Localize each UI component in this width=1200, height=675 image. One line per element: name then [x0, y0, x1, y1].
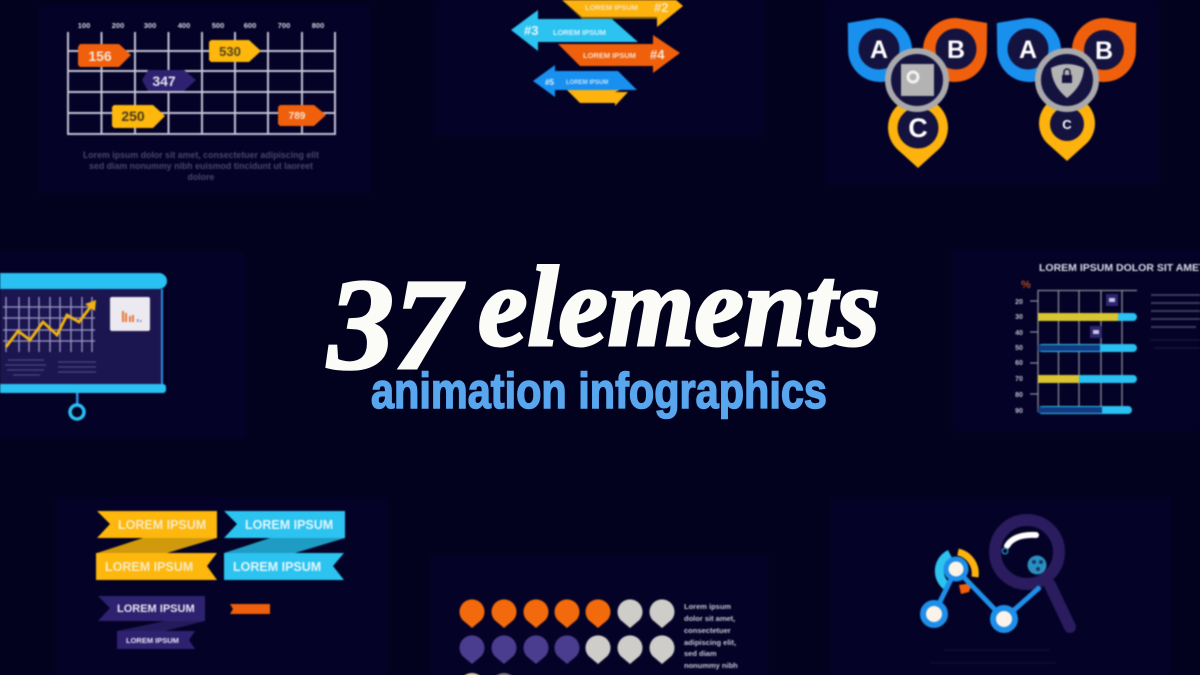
purple ribbon: LOREM IPSUM	[126, 636, 179, 645]
axis labels: 100	[78, 21, 90, 30]
arrow 4: LOREM IPSUM	[583, 51, 636, 60]
row labels: 90	[1015, 408, 1023, 415]
arrow 3: LOREM IPSUM	[553, 28, 606, 37]
side text: Lorem ipsum	[684, 602, 731, 611]
row labels: 50	[1015, 345, 1023, 352]
stand ring	[70, 393, 84, 419]
panel: pin pictogram	[430, 555, 768, 675]
row labels: 20	[1015, 299, 1023, 306]
tag 530: 530	[219, 44, 241, 59]
purple pins	[460, 635, 580, 664]
bar 1	[1038, 313, 1137, 321]
board	[0, 289, 162, 385]
tag 156: 156	[88, 48, 112, 64]
arrow 2	[562, 0, 683, 27]
left pin group: C	[908, 113, 928, 143]
left pin group	[827, 0, 1008, 168]
top bar	[0, 273, 167, 289]
tag 156	[78, 44, 131, 67]
right pin group: A	[1019, 36, 1037, 64]
bar 2	[1038, 344, 1137, 352]
arrow 2: #2	[654, 0, 668, 15]
axis labels: 300	[144, 21, 156, 30]
yellow ribbon: LOREM IPSUM	[118, 518, 206, 532]
panel: presentation board	[0, 252, 245, 438]
purple ribbon: LOREM IPSUM	[117, 603, 195, 615]
yellow ribbon: LOREM IPSUM	[105, 560, 193, 574]
line chart	[923, 559, 1040, 630]
panel: percentage bars	[952, 250, 1200, 432]
value markers	[1090, 294, 1118, 338]
bar 3	[1038, 375, 1137, 383]
panel: arrows	[433, 0, 765, 137]
arrow 3: #3	[524, 23, 538, 38]
row labels: 30	[1015, 314, 1023, 321]
caption	[83, 150, 319, 182]
icon: shield lock	[1051, 64, 1084, 98]
yellow ribbon	[96, 511, 217, 580]
title	[326, 243, 880, 397]
chart grid	[3, 297, 95, 352]
caption: Lorem ipsum dolor sit amet, consectetuer adipiscing elit	[83, 150, 319, 160]
right pin group: B	[1095, 37, 1113, 65]
arrow 5	[533, 65, 637, 97]
row labels: 70	[1015, 376, 1023, 383]
caption: sed diam nonummy nibh euismod tincidunt ut laoreet	[89, 161, 313, 171]
grid	[1030, 290, 1137, 412]
side text: sed diam	[684, 649, 717, 658]
left pin group: A	[870, 36, 888, 64]
side text	[1151, 295, 1200, 327]
right pin group: C	[1062, 117, 1072, 132]
icon card	[110, 297, 150, 331]
grid	[68, 32, 335, 135]
faint caption	[930, 650, 1055, 663]
subtitle: animation infographics	[371, 363, 827, 419]
partial third row	[459, 673, 517, 675]
side text: nonummy nibh	[684, 661, 738, 670]
icon: safe	[901, 64, 934, 96]
tag 789: 789	[289, 111, 306, 122]
axis labels: 600	[244, 21, 256, 30]
orange pins	[460, 599, 610, 628]
donut	[939, 552, 975, 594]
arrow 5: #5	[545, 78, 554, 87]
tag 347: 347	[152, 73, 176, 89]
left pin group: B	[947, 36, 965, 64]
small orange ribbon	[230, 604, 270, 614]
tag 250	[112, 105, 165, 128]
trend line	[6, 300, 96, 347]
blue ribbon: LOREM IPSUM	[245, 518, 333, 532]
tag 347	[142, 70, 196, 91]
panel: magnifier line chart	[830, 497, 1170, 675]
percent sign: %	[1021, 279, 1031, 291]
tag 530	[209, 40, 261, 62]
row labels: 60	[1015, 360, 1023, 367]
arrow 4	[558, 35, 680, 73]
panel: ribbons	[55, 497, 388, 675]
axis labels: 800	[312, 21, 324, 30]
panel: grid chart with tags	[38, 5, 370, 193]
arrow 6	[567, 90, 628, 106]
row labels: 40	[1015, 330, 1023, 337]
caption lines	[5, 360, 96, 375]
axis labels: 400	[178, 21, 190, 30]
tag 789	[278, 105, 326, 126]
arrow 4: #4	[650, 47, 665, 62]
caption: dolore	[188, 172, 215, 182]
side text: consectetuer	[684, 626, 731, 635]
axis labels: 500	[212, 21, 224, 30]
side text	[684, 602, 738, 670]
right pin group	[976, 0, 1157, 161]
arrow 3	[511, 10, 638, 51]
axis labels: 200	[112, 21, 124, 30]
title word: elements	[478, 243, 880, 370]
icon: globe	[1028, 556, 1046, 574]
axis labels	[78, 21, 324, 30]
side text: adipiscing elit,	[684, 638, 736, 647]
arrow 5: LOREM IPSUM	[566, 80, 608, 86]
row labels	[1015, 299, 1023, 415]
bar 4	[1038, 406, 1132, 414]
bottom bar	[0, 384, 166, 393]
side text: dolor sit amet,	[684, 614, 735, 623]
magnifier	[995, 520, 1070, 627]
grey pins	[586, 599, 674, 664]
axis labels: 700	[278, 21, 290, 30]
purple ribbon	[98, 596, 205, 649]
blue ribbon	[224, 511, 345, 580]
arrow 2: LOREM IPSUM	[585, 3, 638, 12]
blue ribbon: LOREM IPSUM	[233, 560, 321, 574]
tag 250: 250	[121, 108, 145, 124]
row labels: 80	[1015, 392, 1023, 399]
title number: 37	[326, 253, 465, 397]
panel: ABC pins	[825, 0, 1160, 185]
